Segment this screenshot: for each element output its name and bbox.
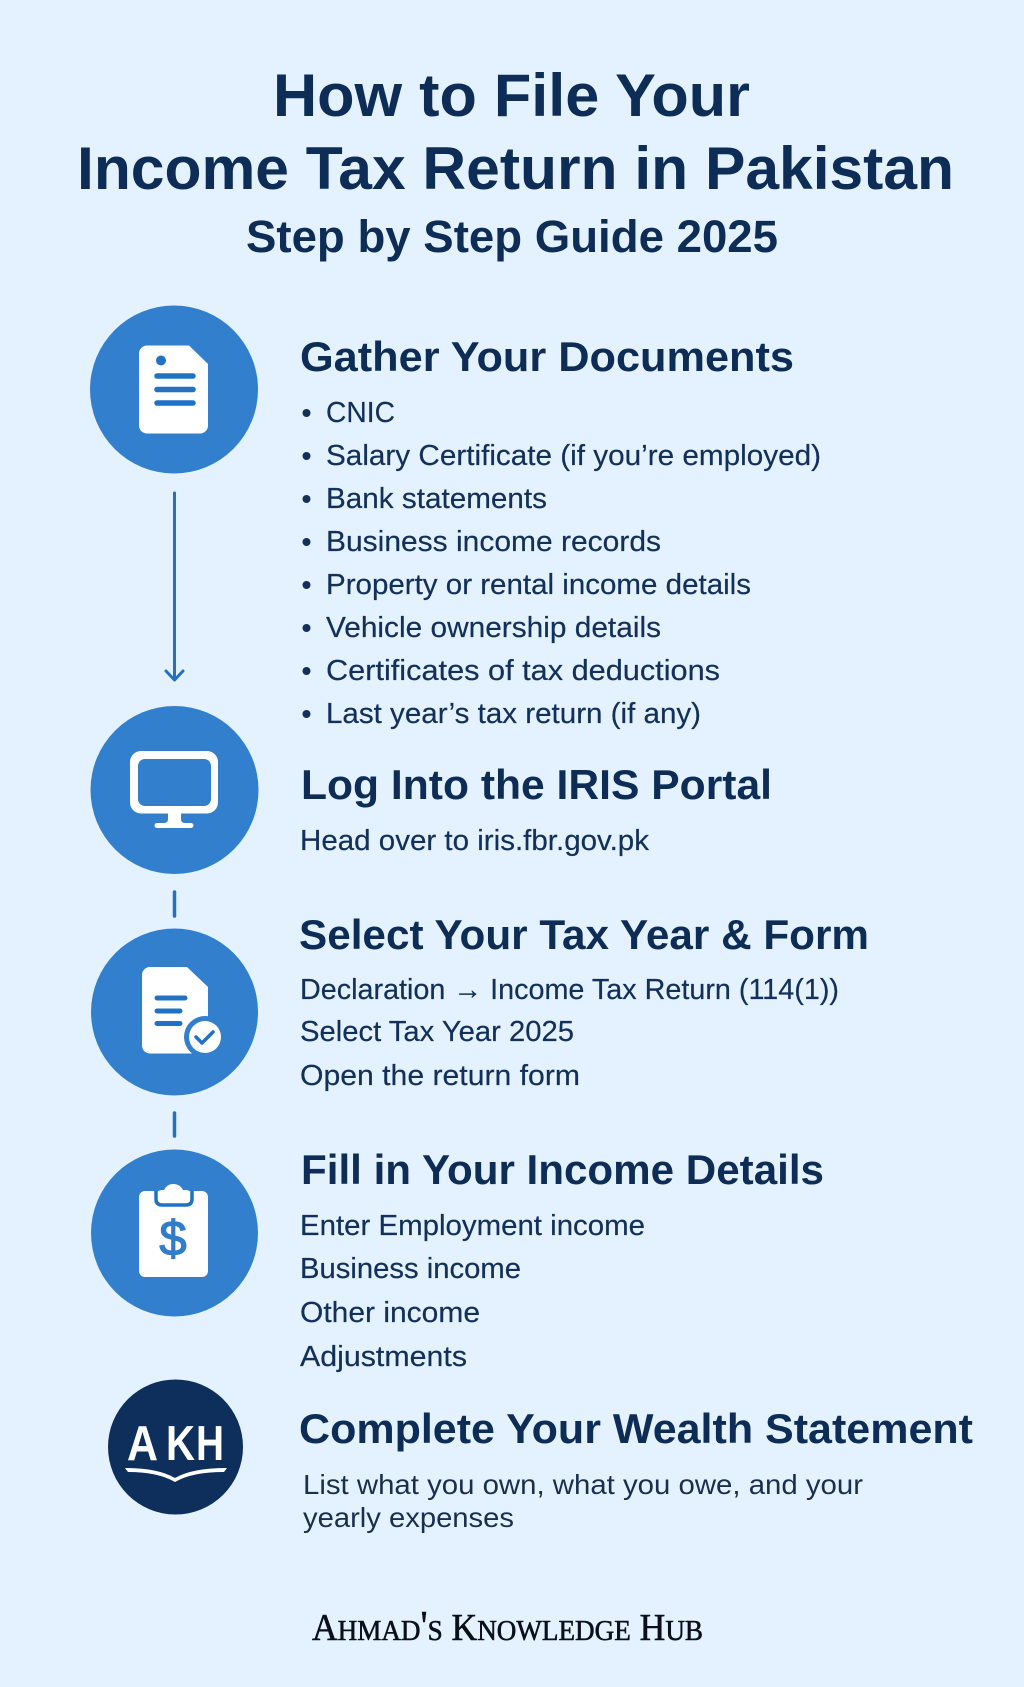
icon: document in circle (90, 306, 258, 474)
step 4 text: Adjustments (300, 1341, 467, 1373)
logo: AKH with open book (108, 1380, 243, 1514)
step 3 text: Select Tax Year 2025 (300, 1016, 574, 1048)
icon: clipboard with dollar in circle: $ (159, 1212, 187, 1266)
logo: AKH with open book: A (127, 1417, 158, 1471)
step 2 heading: Log Into the IRIS Portal (301, 761, 772, 808)
title (77, 62, 954, 202)
step 4 text: Other income (300, 1297, 480, 1329)
step 4 text: Enter Employment income (300, 1210, 645, 1242)
step 1 document list: Bank statements (326, 483, 547, 515)
step 5 heading: Complete Your Wealth Statement (299, 1405, 973, 1452)
step 1 document list: Certificates of tax deductions (326, 655, 720, 687)
step 3 text (300, 974, 839, 1092)
logo: AKH with open book: K (166, 1417, 195, 1471)
icon: monitor in circle (90, 706, 258, 874)
logo: AKH with open book: H (196, 1417, 224, 1471)
step 3 text: Declaration → Income Tax Return (114(1)) (300, 974, 839, 1006)
title: How to File Your (273, 62, 750, 129)
step 5 text (303, 1469, 863, 1533)
step 2 text: Head over to iris.fbr.gov.pk (300, 825, 650, 857)
connector: step 3 to step 4 (173, 1113, 176, 1136)
step 4 heading: Fill in Your Income Details (301, 1146, 824, 1193)
step 1 document list: Salary Certificate (if you’re employed) (326, 440, 821, 472)
step 1 document list: CNIC (326, 397, 395, 429)
step 4 text (300, 1210, 645, 1373)
connector: step 2 to step 3 (173, 892, 176, 916)
step 3 text: Open the return form (300, 1060, 580, 1092)
step 4 text: Business income (300, 1253, 521, 1285)
step 5 text: List what you own, what you owe, and your (303, 1469, 863, 1500)
step 1 document list: Vehicle ownership details (326, 612, 661, 644)
icon: clipboard with dollar in circle (91, 1150, 258, 1316)
subtitle: Step by Step Guide 2025 (246, 211, 778, 262)
step 1 document list: Last year’s tax return (if any) (326, 698, 701, 730)
step 1 document list: Business income records (326, 526, 661, 558)
step 1 document list: Property or rental income details (326, 569, 751, 601)
step 3 heading: Select Your Tax Year & Form (299, 911, 869, 958)
title: Income Tax Return in Pakistan (77, 135, 954, 202)
footer brand name: Ahmad's Knowledge Hub (312, 1604, 703, 1650)
arrow: step 1 to step 2 (166, 493, 183, 680)
step 5 text: yearly expenses (303, 1502, 514, 1533)
icon: document with check in circle (91, 928, 258, 1096)
step 1 document list (302, 397, 821, 730)
step 1 heading: Gather Your Documents (300, 333, 794, 380)
